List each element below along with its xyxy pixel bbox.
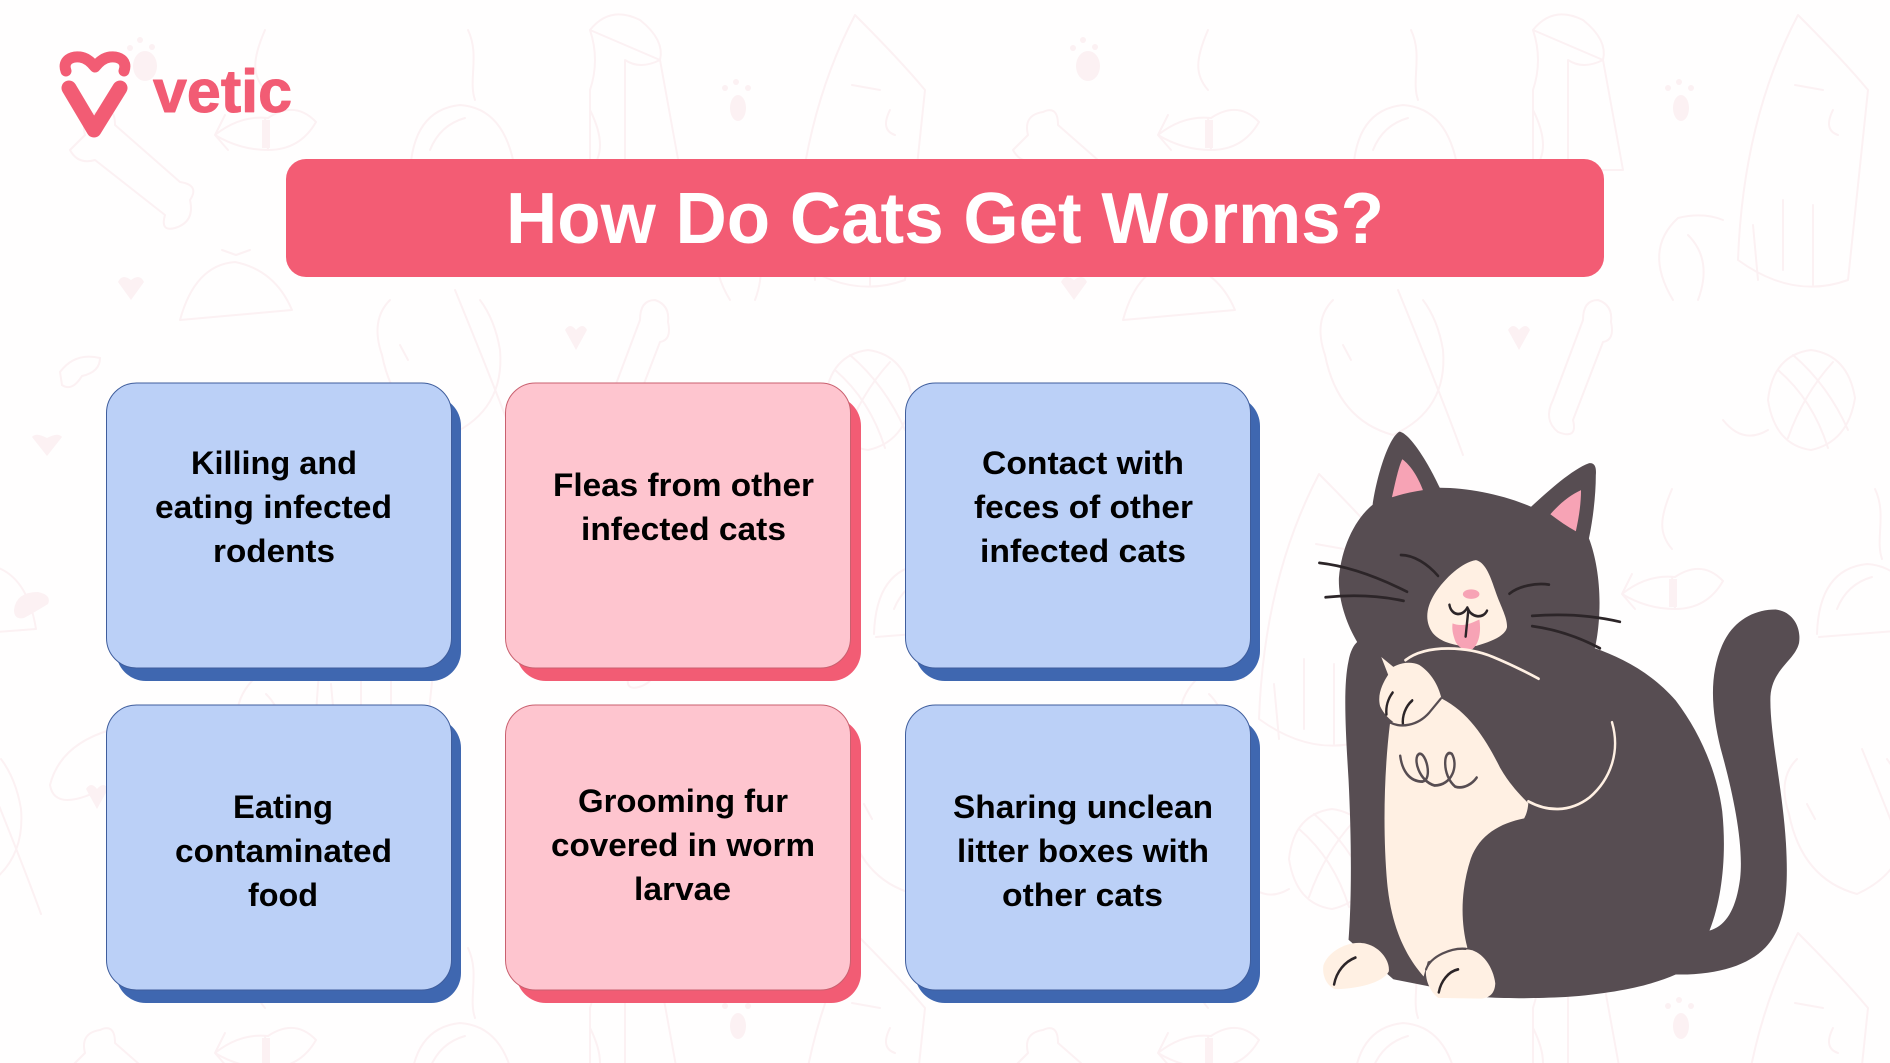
card text: eating infected: [155, 489, 392, 525]
card text: Fleas from other: [553, 467, 814, 503]
panel: killing and eating infected rodents: [106, 383, 461, 681]
card text: litter boxes with: [957, 833, 1209, 869]
card text: Contact with: [982, 445, 1184, 481]
card text: larvae: [634, 871, 731, 907]
panel: eating contaminated food: [106, 705, 461, 1003]
title banner: [286, 159, 1604, 277]
icon: heart and V mark: [65, 57, 125, 130]
logo wordmark: vetic: [153, 58, 292, 125]
card text: [551, 783, 815, 907]
card text: Grooming fur: [578, 783, 788, 819]
card text: feces of other: [974, 489, 1193, 525]
cat raised paw: [1379, 657, 1442, 726]
panel: grooming fur: [506, 705, 861, 1003]
panel: fleas from other infected cats: [506, 383, 861, 681]
cat line details: [1319, 555, 1620, 992]
cat belly: [1385, 699, 1528, 976]
cat ears: [1392, 459, 1581, 531]
card text: [155, 445, 392, 569]
card text: contaminated: [175, 833, 392, 869]
cat face patch: [1427, 560, 1507, 646]
panel: sharing unclean litter boxes: [906, 705, 1260, 1003]
card text: [553, 467, 814, 547]
card text: infected cats: [581, 511, 786, 547]
card text: Sharing unclean: [953, 789, 1213, 825]
cat feet: [1323, 943, 1389, 989]
card text: food: [248, 877, 318, 913]
card text: other cats: [1002, 877, 1163, 913]
card text: [953, 789, 1213, 913]
card text: rodents: [213, 533, 335, 569]
card text: [974, 445, 1193, 569]
title: How Do Cats Get Worms?: [506, 179, 1384, 259]
card text: [175, 789, 392, 913]
card text: Eating: [233, 789, 333, 825]
card text: covered in worm: [551, 827, 815, 863]
card text: infected cats: [980, 533, 1186, 569]
panel: contact with feces: [906, 383, 1260, 681]
card text: Killing and: [191, 445, 357, 481]
logo: vetic: [65, 57, 292, 130]
cat tongue: [1452, 619, 1480, 650]
cat nose: [1463, 589, 1479, 599]
illustration: grooming tuxedo cat: [1319, 432, 1799, 999]
cat body: [1339, 432, 1799, 998]
